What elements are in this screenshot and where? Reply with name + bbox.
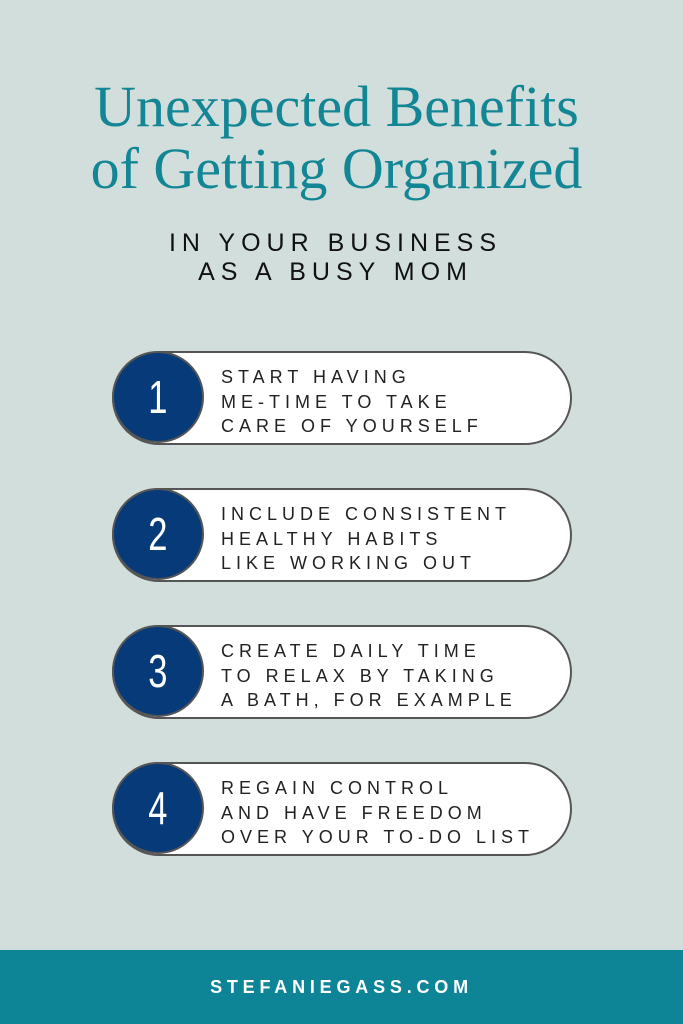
text 1 bbox=[221, 367, 483, 436]
number 4 bbox=[112, 762, 204, 854]
footer bbox=[0, 950, 683, 1024]
number 2: 2 bbox=[148, 508, 168, 560]
text 4: AND HAVE FREEDOM bbox=[221, 802, 487, 822]
title: Unexpected Benefits bbox=[94, 74, 579, 139]
text 1: CARE OF YOURSELF bbox=[221, 416, 483, 436]
number 1 bbox=[112, 351, 204, 443]
text 3: A BATH, FOR EXAMPLE bbox=[221, 690, 517, 710]
item 2 bbox=[112, 488, 572, 582]
text 2: HEALTHY HABITS bbox=[221, 528, 442, 548]
text 4: REGAIN CONTROL bbox=[221, 778, 453, 798]
text 2 bbox=[221, 504, 511, 573]
item 1 bbox=[112, 351, 572, 445]
subtitle bbox=[169, 229, 502, 286]
footer: STEFANIEGASS.COM bbox=[210, 977, 473, 997]
number 4: 4 bbox=[148, 782, 168, 834]
title: of Getting Organized bbox=[91, 136, 582, 201]
number 3 bbox=[112, 625, 204, 717]
title bbox=[91, 74, 582, 201]
text 1: START HAVING bbox=[221, 367, 411, 387]
text 3: TO RELAX BY TAKING bbox=[221, 666, 499, 686]
text 4: OVER YOUR TO-DO LIST bbox=[221, 827, 534, 847]
item 4 bbox=[112, 762, 572, 856]
subtitle: AS A BUSY MOM bbox=[198, 258, 473, 286]
text 2: LIKE WORKING OUT bbox=[221, 553, 476, 573]
text 2: INCLUDE CONSISTENT bbox=[221, 504, 511, 524]
text 4 bbox=[221, 778, 534, 847]
text 3 bbox=[221, 641, 517, 710]
number 3: 3 bbox=[148, 645, 168, 697]
item 3 bbox=[112, 625, 572, 719]
number 1: 1 bbox=[148, 371, 168, 423]
text 1: ME-TIME TO TAKE bbox=[221, 392, 452, 412]
subtitle: IN YOUR BUSINESS bbox=[169, 229, 502, 257]
number 2 bbox=[112, 488, 204, 580]
text 3: CREATE DAILY TIME bbox=[221, 641, 481, 661]
